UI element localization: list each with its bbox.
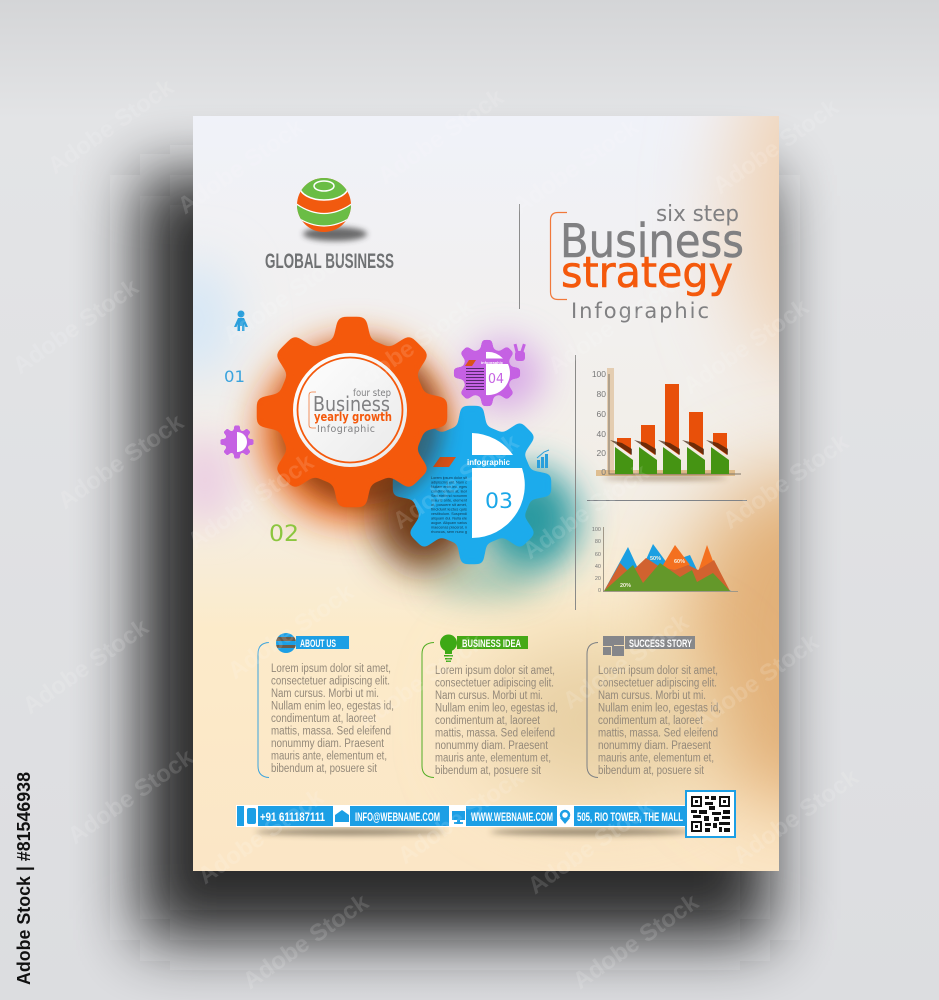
bar fold shadows bbox=[610, 440, 728, 455]
title: six step: six step bbox=[656, 202, 739, 227]
watermarks: Adobe Stock bbox=[708, 93, 844, 200]
success story text: condimentum at, laoreet bbox=[598, 715, 704, 727]
watermarks: Adobe Stock bbox=[343, 293, 479, 400]
address: 505, RIO TOWER, THE MALL bbox=[577, 810, 683, 824]
green bars bbox=[615, 447, 729, 474]
small gear half disc bbox=[237, 432, 247, 452]
icon: striped globe bbox=[276, 633, 296, 653]
blue area bbox=[604, 544, 731, 591]
success story text: Nullam enim leo, egestas id, bbox=[598, 702, 721, 714]
y axis labels: 80 bbox=[597, 389, 606, 399]
watermarks: Adobe Stock bbox=[508, 113, 644, 220]
title: Business: Business bbox=[560, 214, 744, 268]
blue gear body bbox=[393, 406, 551, 564]
area chart y labels: 80 bbox=[595, 539, 601, 545]
small body text: rhoncus, sem nunc g bbox=[431, 529, 467, 534]
business idea text: nonummy diam. Praesent bbox=[435, 740, 549, 752]
success story text: Nam cursus. Morbi ut mi. bbox=[598, 690, 706, 702]
area labels: 60% bbox=[674, 559, 685, 565]
success story banner bbox=[625, 636, 695, 649]
area labels: 50% bbox=[650, 556, 661, 562]
blue gear half disc bbox=[472, 433, 525, 538]
watermarks: Adobe Stock bbox=[18, 613, 154, 720]
about us text: Lorem ipsum dolor sit amet, bbox=[271, 663, 391, 675]
business idea text: consectetuer adipiscing elit. bbox=[435, 678, 554, 690]
small body text: mauris ante, element bbox=[431, 498, 468, 502]
purple badge label: infographic bbox=[481, 360, 504, 365]
panel: business idea bbox=[422, 634, 558, 778]
y axis labels: 20 bbox=[597, 448, 606, 458]
watermarks: Adobe Stock bbox=[393, 763, 529, 870]
flyer drop shadow bbox=[140, 175, 770, 940]
success story text: bibendum at, posuere sit bbox=[598, 765, 705, 777]
success story text: consectetuer adipiscing elit. bbox=[598, 678, 717, 690]
panel: flyer background bbox=[193, 116, 779, 871]
small body text: Lorem ipsum dolor sit bbox=[431, 475, 468, 480]
disc bracket bbox=[309, 392, 316, 428]
orange bars bbox=[617, 384, 727, 455]
orange gear shadow bbox=[282, 345, 442, 505]
about us heading: ABOUT US bbox=[300, 638, 336, 650]
y axis labels: 0 bbox=[601, 467, 606, 477]
about us text: condimentum at, laoreet bbox=[271, 713, 377, 725]
contact bar shadows bbox=[255, 828, 690, 836]
light orange peaks bbox=[660, 545, 690, 570]
disc text: yearly growth: yearly growth bbox=[314, 410, 392, 424]
small body text: Nullam enim leo, eges bbox=[431, 484, 467, 489]
watermarks: Adobe Stock bbox=[63, 743, 199, 850]
small gear body bbox=[220, 426, 254, 458]
small body text: tincidunt lectus quis bbox=[431, 506, 467, 512]
axis shadow bbox=[603, 476, 727, 480]
step number 02: 02 bbox=[269, 522, 299, 547]
small body text: maecenas placerat, n bbox=[431, 524, 467, 530]
success story text: Lorem ipsum dolor sit amet, bbox=[598, 665, 718, 677]
about us text: mattis, massa. Sed eleifend bbox=[271, 726, 391, 738]
header divider bbox=[519, 204, 520, 309]
area chart bbox=[592, 527, 738, 594]
small body text: adipiscing elit. Nam c bbox=[431, 480, 467, 484]
panel: success story bbox=[587, 636, 721, 778]
purple small text bbox=[466, 368, 484, 390]
area chart y labels: 0 bbox=[598, 588, 601, 594]
gear 01: orange bbox=[257, 317, 447, 507]
watermarks: Adobe Stock bbox=[388, 428, 524, 535]
business idea bracket bbox=[422, 642, 434, 778]
vertical divider bbox=[575, 355, 576, 610]
step number 01: 01 bbox=[224, 367, 245, 386]
qr code bbox=[686, 791, 735, 837]
business idea text: bibendum at, posuere sit bbox=[435, 765, 542, 777]
watermarks: Adobe Stock bbox=[718, 428, 854, 535]
about us text: nonummy diam. Praesent bbox=[271, 738, 385, 750]
small body text bbox=[431, 475, 468, 534]
contact bar bbox=[236, 791, 735, 837]
icon: striped globe bbox=[297, 178, 351, 232]
email: INFO@WEBNAME.COM bbox=[355, 810, 440, 824]
area chart y labels: 60 bbox=[595, 552, 601, 558]
y axis labels: 60 bbox=[597, 409, 606, 419]
title block bbox=[550, 202, 744, 323]
watermarks: Adobe Stock bbox=[353, 628, 489, 735]
business idea text: mauris ante, elementum et, bbox=[435, 752, 551, 764]
panel: about us bbox=[258, 633, 394, 778]
business idea banner bbox=[457, 636, 528, 649]
website: WWW.WEBNAME.COM bbox=[471, 810, 553, 824]
watermarks: Adobe Stock bbox=[688, 628, 824, 735]
business idea text: mattis, massa. Sed eleifend bbox=[435, 728, 555, 740]
watermarks: Adobe Stock bbox=[238, 888, 374, 995]
disc text: Business: Business bbox=[313, 392, 390, 416]
icon: light bulb bbox=[440, 634, 457, 662]
watermarks: Adobe Stock bbox=[8, 273, 144, 380]
about us banner bbox=[296, 636, 349, 649]
watermarks: Adobe Stock bbox=[558, 608, 694, 715]
about us text: consectetuer adipiscing elit. bbox=[271, 676, 390, 688]
title bracket bbox=[550, 212, 567, 300]
purple gear body bbox=[454, 340, 520, 406]
success story text: mattis, massa. Sed eleifend bbox=[598, 728, 718, 740]
icon: phone bbox=[247, 808, 256, 824]
small body text: condimentum at, laor bbox=[431, 488, 468, 494]
success story bracket bbox=[587, 642, 598, 778]
right orange peak bbox=[697, 545, 722, 585]
business idea text: Nam cursus. Morbi ut mi. bbox=[435, 690, 543, 702]
chart divider bbox=[587, 500, 747, 501]
number 04: 04 bbox=[488, 372, 504, 387]
watermarks: Adobe Stock bbox=[218, 243, 354, 350]
icon: puzzle bbox=[603, 636, 624, 656]
icon: envelope bbox=[335, 810, 349, 822]
purple half disc bbox=[486, 352, 510, 395]
about us bracket bbox=[258, 642, 269, 778]
icon: person bbox=[234, 310, 248, 331]
business idea heading: BUSINESS IDEA bbox=[462, 638, 521, 650]
contact bar blue segments bbox=[237, 806, 687, 826]
watermarks: Adobe Stock bbox=[173, 113, 309, 220]
about us text: bibendum at, posuere sit bbox=[271, 763, 378, 775]
gear 03: blue bbox=[393, 406, 551, 564]
gear 04: purple bbox=[454, 340, 520, 406]
watermarks: Adobe Stock bbox=[53, 408, 189, 515]
logo sphere shadow bbox=[303, 227, 367, 241]
logo: global business bbox=[265, 174, 394, 273]
bar chart bbox=[592, 368, 741, 480]
small body text: augue. Aliquam varius bbox=[431, 520, 467, 525]
small body text: Sed eleifend nonumm bbox=[431, 493, 468, 498]
business idea text: Nullam enim leo, egestas id, bbox=[435, 702, 558, 714]
small purple gear bbox=[220, 426, 254, 458]
watermarks: Adobe Stock bbox=[518, 458, 654, 565]
stock id side text: Adobe Stock | #81546938 bbox=[14, 772, 34, 985]
watermarks: Adobe Stock bbox=[728, 763, 864, 870]
small body text: vestibulum. Suspendi bbox=[431, 511, 467, 516]
success story text bbox=[598, 665, 721, 777]
contact bar strip bbox=[236, 805, 688, 827]
area chart axes bbox=[604, 527, 738, 592]
icon: monitor bbox=[452, 811, 465, 824]
icon: victory hand bbox=[514, 344, 526, 361]
title: strategy: strategy bbox=[561, 248, 733, 298]
y axis labels: 100 bbox=[592, 369, 606, 379]
watermarks: Adobe Stock bbox=[183, 448, 319, 555]
badge label: infographic bbox=[467, 458, 511, 467]
icon: growth chart bbox=[537, 450, 549, 468]
y axis labels bbox=[592, 369, 606, 477]
muted orange area bbox=[604, 558, 730, 591]
small body text: aliquam dui. Nulla ele bbox=[431, 516, 468, 520]
watermarks: Adobe Stock bbox=[678, 293, 814, 400]
about us text: Nam cursus. Morbi ut mi. bbox=[271, 688, 379, 700]
centre disc bbox=[293, 353, 407, 467]
area chart y labels: 100 bbox=[592, 527, 601, 533]
about us text: mauris ante, elementum et, bbox=[271, 750, 387, 762]
watermarks: Adobe Stock bbox=[223, 578, 359, 685]
disc text: four step: four step bbox=[353, 388, 391, 399]
disc text: Infographic: Infographic bbox=[317, 424, 375, 435]
business idea text: Lorem ipsum dolor sit amet, bbox=[435, 665, 555, 677]
y axis labels: 40 bbox=[597, 429, 606, 439]
purple badge bbox=[465, 360, 476, 366]
title: Infographic: Infographic bbox=[571, 299, 709, 323]
about us text: Nullam enim leo, egestas id, bbox=[271, 700, 394, 712]
orange gear body bbox=[257, 317, 447, 507]
watermarks: Adobe Stock bbox=[373, 83, 509, 190]
green area bbox=[604, 563, 730, 591]
watermarks: Adobe Stock bbox=[43, 73, 179, 180]
infographic badge bbox=[433, 457, 456, 467]
logo wordmark: GLOBAL BUSINESS bbox=[265, 250, 394, 273]
watermarks: Adobe Stock bbox=[523, 793, 659, 900]
small body text: at, posuere sit amet, bbox=[431, 502, 467, 507]
area chart y labels: 40 bbox=[595, 564, 601, 570]
watermarks: Adobe Stock bbox=[193, 783, 329, 890]
success story text: mauris ante, elementum et, bbox=[598, 752, 714, 764]
area labels bbox=[620, 556, 685, 589]
business idea text: condimentum at, laoreet bbox=[435, 715, 541, 727]
area labels: 20% bbox=[620, 583, 631, 589]
area chart y labels bbox=[592, 527, 601, 594]
about us text bbox=[271, 663, 394, 775]
success story heading: SUCCESS STORY bbox=[629, 638, 692, 650]
business idea text bbox=[435, 665, 558, 777]
icon: map pin bbox=[560, 811, 570, 824]
area chart y labels: 20 bbox=[595, 576, 601, 582]
success story text: nonummy diam. Praesent bbox=[598, 740, 712, 752]
phone number: +91 611187111 bbox=[260, 810, 325, 824]
watermarks: Adobe Stock bbox=[568, 888, 704, 995]
number 03: 03 bbox=[485, 489, 513, 513]
bar chart axes bbox=[609, 374, 741, 474]
watermarks: Adobe Stock bbox=[543, 273, 679, 380]
bar chart tan guides bbox=[596, 470, 735, 476]
